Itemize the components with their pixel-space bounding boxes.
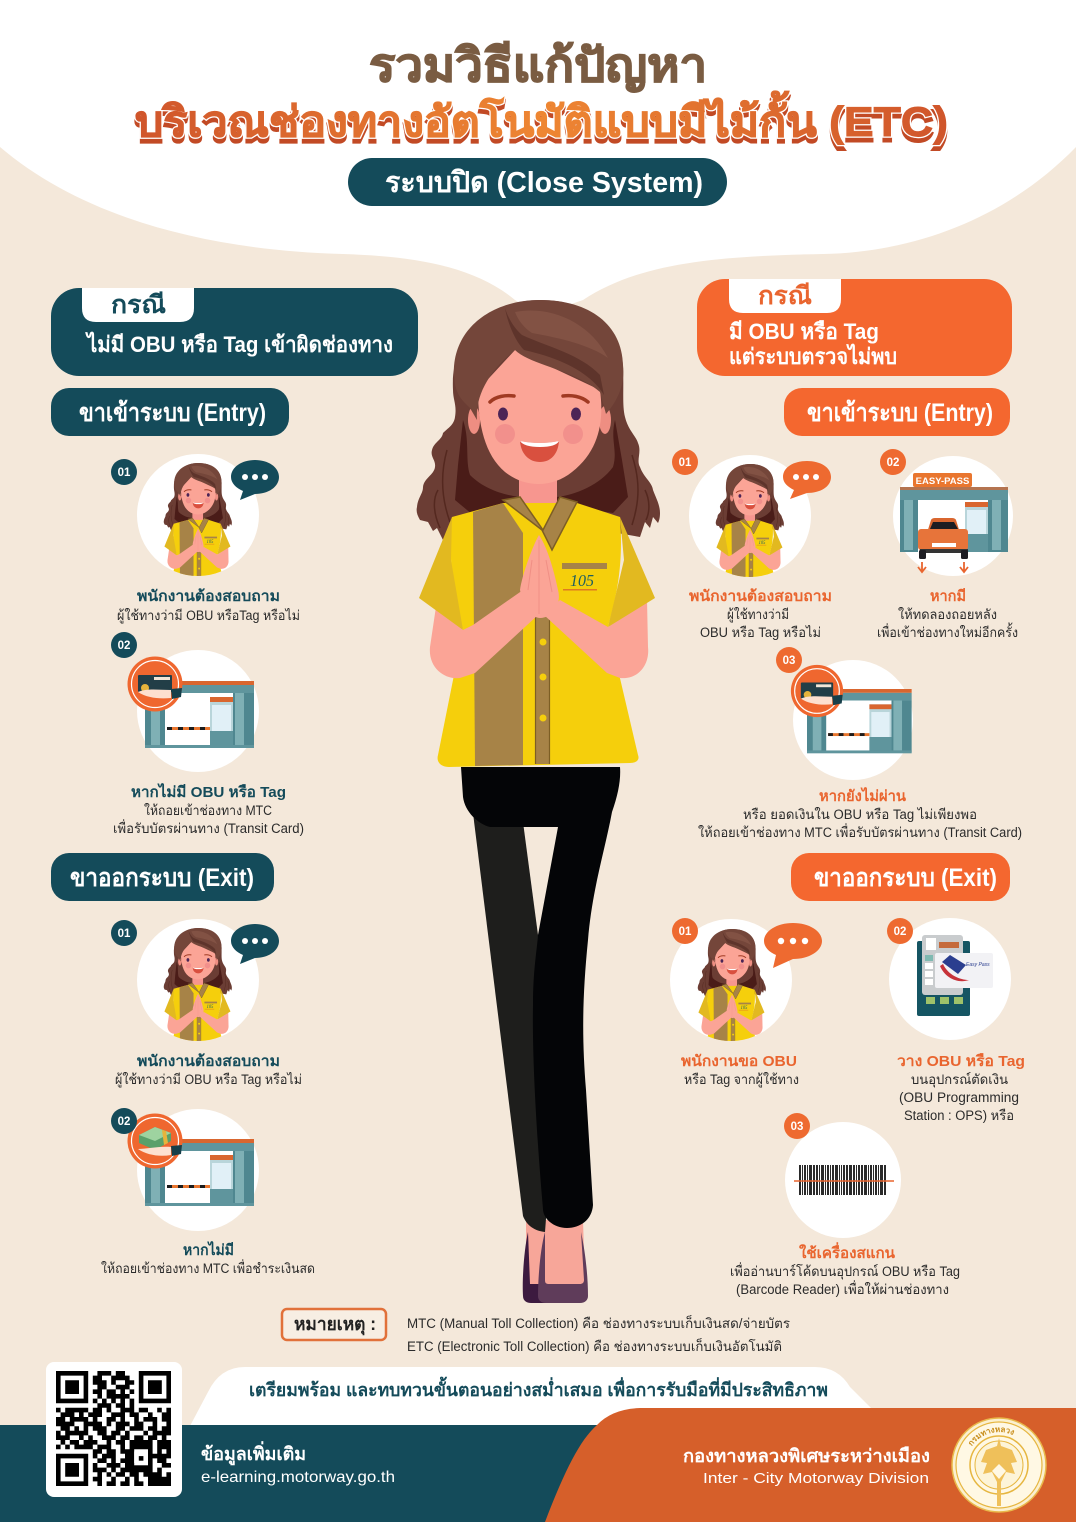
central woman illustration (417, 300, 660, 1303)
step text (113, 782, 304, 836)
badge 02: 02 (118, 1116, 130, 1128)
step text: ใช้เครื่องสแกน (799, 1242, 896, 1262)
white slogan banner: เตรียมพร้อม และทบทวนขั้นตอนอย่างสม่ำเสมอ เพื่อการรับมือที่มีประสิทธิภาพ (249, 1376, 828, 1400)
note label (282, 1309, 386, 1340)
QR modules (56, 1371, 171, 1486)
step: right exit 03 (730, 1113, 960, 1297)
step text: หรือ Tag จากผู้ใช้ทาง (684, 1071, 799, 1088)
tab: case label: กรณี (758, 282, 812, 310)
system pill (348, 158, 727, 206)
step text (730, 1242, 960, 1297)
icon: easy pass card: Easy Pass (966, 962, 990, 968)
step text (681, 1053, 799, 1088)
system pill: ระบบปิด (Close System) (385, 167, 703, 199)
badge 03 (784, 1113, 810, 1139)
step text: หากไม่มี OBU หรือ Tag (131, 782, 286, 801)
upper body (417, 300, 660, 767)
step text: หากไม่มี (183, 1240, 234, 1259)
note (282, 1309, 790, 1354)
badge 02: 02 (887, 457, 899, 469)
step: left entry 01 (111, 454, 300, 624)
icon: staff (164, 928, 232, 1041)
badge 03: 03 (791, 1121, 803, 1133)
badge 02 (111, 1108, 137, 1134)
step text: OBU หรือ Tag หรือไม่ (700, 625, 821, 640)
white top curved shape (0, 0, 1076, 315)
tab: case label (729, 279, 841, 313)
icon: speech bubble (783, 461, 831, 499)
step: left exit 02 (101, 1108, 315, 1276)
step text: พนักงานขอ OBU (681, 1053, 797, 1070)
icon: card in hand (791, 665, 843, 717)
step: right entry 02 (877, 449, 1018, 640)
step text: ผู้ใช้ทางว่ามี (727, 606, 789, 623)
step: right entry 03 (698, 647, 1022, 840)
step text: เพื่อเข้าช่องทางใหม่อีกครั้ง (877, 622, 1018, 640)
icon: speech bubble (231, 924, 279, 964)
step text: หากมี (930, 588, 966, 605)
step: right entry 01 (672, 449, 832, 640)
footer more-info text (201, 1441, 395, 1486)
icon: toll lane (807, 689, 912, 753)
step text (101, 1240, 315, 1276)
step: right exit 02 (887, 918, 1025, 1123)
icon: cash in hand (128, 1114, 182, 1168)
QR code (46, 1362, 182, 1497)
icon: staff (716, 464, 784, 577)
icon: speech bubble (231, 460, 279, 500)
icon: department seal: กรมทางหลวง (969, 1427, 1014, 1446)
step text: บนอุปกรณ์ตัดเงิน (911, 1071, 1008, 1088)
heading: right entry (784, 388, 1010, 436)
step: left entry 02 (111, 632, 304, 836)
step text: ให้ทดลองถอยหลัง (898, 606, 997, 622)
step text: Station : OPS) หรือ (904, 1108, 1014, 1123)
white slogan banner (190, 1367, 875, 1426)
panel: case right (697, 279, 1012, 376)
step text: ให้ถอยเข้าช่องทาง MTC เพื่อชำระเงินสด (101, 1259, 315, 1276)
badge 01 (672, 918, 698, 944)
badge 02 (880, 449, 906, 475)
icon: easy-pass lane with car: EASY-PASS (916, 476, 969, 487)
note definitions: ETC (Electronic Toll Collection) คือ ช่องทางระบบเก็บเงินอัตโนมัติ (407, 1337, 782, 1354)
step text: หากยังไม่ผ่าน (819, 786, 907, 805)
title (135, 39, 948, 206)
step text (877, 588, 1018, 640)
note definitions (407, 1314, 790, 1354)
step text (115, 1053, 302, 1088)
panel: case left (51, 288, 418, 376)
icon: department seal (951, 1417, 1047, 1513)
heading line two: บริเวณช่องทางอัตโนมัติแบบมีไม้กั้น (ETC) (135, 90, 948, 145)
case description (729, 319, 897, 369)
step text: (OBU Programming (899, 1090, 1019, 1105)
step text: (Barcode Reader) เพื่อให้ผ่านช่องทาง (736, 1280, 949, 1297)
heading: left exit: ขาออกระบบ (Exit) (70, 864, 254, 892)
step text (698, 786, 1022, 840)
footer orange block (545, 1408, 1076, 1522)
badge 03 (776, 647, 802, 673)
icon: staff (164, 463, 232, 576)
badge 02: 02 (118, 640, 130, 652)
badge 03: 03 (783, 655, 795, 667)
footer band (0, 1408, 1076, 1522)
step text: หรือ ยอดเงินใน OBU หรือ Tag ไม่เพียงพอ (743, 806, 977, 822)
badge 01: 01 (118, 928, 131, 940)
step text: ให้ถอยเข้าช่องทาง MTC (144, 802, 272, 818)
badge 01 (672, 449, 698, 475)
icon: toll lane (145, 681, 254, 748)
icon: card in hand (128, 656, 182, 712)
step text: วาง OBU หรือ Tag (897, 1053, 1025, 1070)
footer division name: Inter - City Motorway Division (703, 1470, 929, 1487)
icon: toll lane (145, 1139, 254, 1206)
step text: พนักงานต้องสอบถาม (137, 588, 280, 605)
step text: เพื่ออ่านบาร์โค้ดบนอุปกรณ์ OBU หรือ Tag (730, 1262, 960, 1280)
heading: left entry (51, 388, 289, 436)
badge 01 (111, 459, 137, 485)
badge 01 (111, 920, 137, 946)
footer more-info text: ข้อมูลเพิ่มเติม (201, 1441, 306, 1466)
step text (689, 588, 832, 640)
step text: ผู้ใช้ทางว่ามี OBU หรือTag หรือไม่ (117, 607, 300, 624)
legs (461, 767, 620, 1303)
badge 01: 01 (679, 926, 692, 938)
step: right exit 01 (670, 918, 822, 1088)
heading: left exit (51, 853, 274, 901)
heading: right exit: ขาออกระบบ (Exit) (814, 864, 997, 892)
footer more-info text: e-learning.motorway.go.th (201, 1469, 395, 1486)
footer division name: กองทางหลวงพิเศษระหว่างเมือง (683, 1446, 930, 1466)
icon: staff (698, 929, 766, 1041)
icon: easy-pass lane with car (900, 473, 1008, 572)
badge 01: 01 (679, 457, 692, 469)
case description: แต่ระบบตรวจไม่พบ (729, 343, 897, 369)
step text: พนักงานต้องสอบถาม (137, 1053, 280, 1070)
icon: barcode (794, 1180, 894, 1181)
case description: มี OBU หรือ Tag (729, 319, 879, 344)
heading: left entry: ขาเข้าระบบ (Entry) (79, 399, 266, 427)
step text (117, 588, 300, 624)
badge 01: 01 (118, 467, 131, 479)
heading line one: รวมวิธีแก้ปัญหา (369, 39, 707, 92)
badge 02: 02 (894, 926, 906, 938)
footer division name (683, 1446, 930, 1487)
step text: เพื่อรับบัตรผ่านทาง (Transit Card) (113, 819, 304, 836)
heading: right exit (791, 853, 1010, 901)
step text (897, 1053, 1025, 1123)
note definitions: MTC (Manual Toll Collection) คือ ช่องทางระบบเก็บเงินสด/จ่ายบัตร (407, 1314, 790, 1331)
badge 02 (887, 918, 913, 944)
heading line two: บริเวณช่องทางอัตโนมัติแบบมีไม้กั้น (ETC) (135, 90, 948, 145)
badge 02 (111, 632, 137, 658)
step text: ให้ถอยเข้าช่องทาง MTC เพื่อรับบัตรผ่านทาง (Transit Card) (698, 823, 1022, 840)
note label: หมายเหตุ : (294, 1314, 376, 1336)
step text: ผู้ใช้ทางว่ามี OBU หรือ Tag หรือไม่ (115, 1071, 302, 1088)
step text: พนักงานต้องสอบถาม (689, 588, 832, 605)
step: left exit 01 (111, 919, 302, 1088)
heading line two: บริเวณช่องทางอัตโนมัติแบบมีไม้กั้น (ETC) (135, 95, 948, 150)
icon: speech bubble (764, 923, 822, 968)
tab: case label (82, 288, 194, 322)
heading: right entry: ขาเข้าระบบ (Entry) (807, 399, 993, 427)
icon: OBU programming station (917, 935, 993, 1016)
case description: ไม่มี OBU หรือ Tag เข้าผิดช่องทาง (85, 331, 393, 357)
tab: case label: กรณี (111, 291, 166, 319)
